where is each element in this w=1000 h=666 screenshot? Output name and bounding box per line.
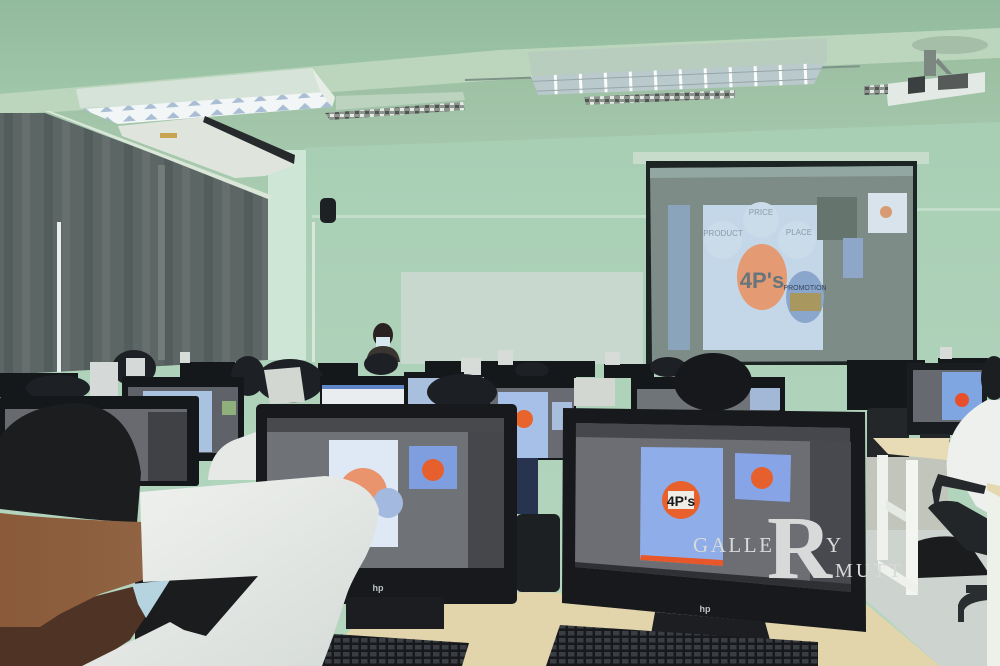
right student in white shirt <box>947 356 1000 520</box>
projection screen: PROMOTION <box>783 285 827 292</box>
dark chair behind front monitors <box>516 514 560 592</box>
face mask <box>132 580 170 618</box>
paper notes on monitors <box>264 367 615 406</box>
white shirt student mid <box>208 432 256 480</box>
right monitor <box>907 363 987 442</box>
air conditioner <box>118 116 295 178</box>
projection screen: PRICE <box>749 208 773 217</box>
middle row monitor with orange circle <box>484 376 576 460</box>
office chair <box>928 474 990 622</box>
curtains on the left wall <box>0 111 273 375</box>
projection screen: PRODUCT <box>703 229 743 238</box>
front left keyboard <box>322 634 469 666</box>
front right keyboard <box>546 625 818 666</box>
front left monitor <box>256 404 517 629</box>
middle row monitor centre left <box>320 376 408 410</box>
white side table <box>873 438 1000 666</box>
panel and floor behind side table <box>866 457 990 666</box>
white shirt sleeve <box>82 476 379 666</box>
watermark: Y <box>826 533 841 557</box>
ceiling light centre <box>528 38 827 105</box>
wall speaker <box>320 198 336 223</box>
projection screen <box>633 152 929 365</box>
dark monitor back <box>867 408 909 483</box>
middle row monitor left <box>122 377 244 461</box>
white box and paper at back left <box>90 358 145 396</box>
projection screen: 4P's <box>740 268 784 293</box>
student head in middle <box>427 374 497 410</box>
back row papers <box>180 347 952 375</box>
front left student hair <box>0 403 141 523</box>
ceiling light left <box>76 68 335 124</box>
student hand and arm <box>0 513 143 627</box>
whiteboard <box>401 272 643 364</box>
student face <box>0 585 150 666</box>
front right monitor: 4P's <box>667 493 695 509</box>
middle row monitor centre <box>404 372 464 408</box>
back row of monitors <box>0 358 988 410</box>
student curly hair <box>674 353 752 411</box>
projection screen: PLACE <box>786 228 812 237</box>
dark bag on floor <box>918 536 990 578</box>
front right monitor <box>562 408 866 640</box>
left monitor near student <box>0 396 199 486</box>
watermark: MUTT <box>835 560 901 582</box>
middle row monitor right <box>631 377 785 411</box>
projector <box>864 36 988 106</box>
HP logo: hp <box>372 583 384 593</box>
student navy shoulder <box>516 458 538 514</box>
wooden desk <box>330 592 940 666</box>
dark area under arm <box>135 575 260 645</box>
back row student heads <box>26 350 686 403</box>
watermark: GALLE <box>693 533 772 557</box>
HP logo: hp <box>700 604 711 614</box>
lecturer <box>366 323 400 362</box>
watermark: R <box>767 499 833 598</box>
watermark <box>693 499 901 598</box>
ceiling light small left <box>325 92 465 120</box>
